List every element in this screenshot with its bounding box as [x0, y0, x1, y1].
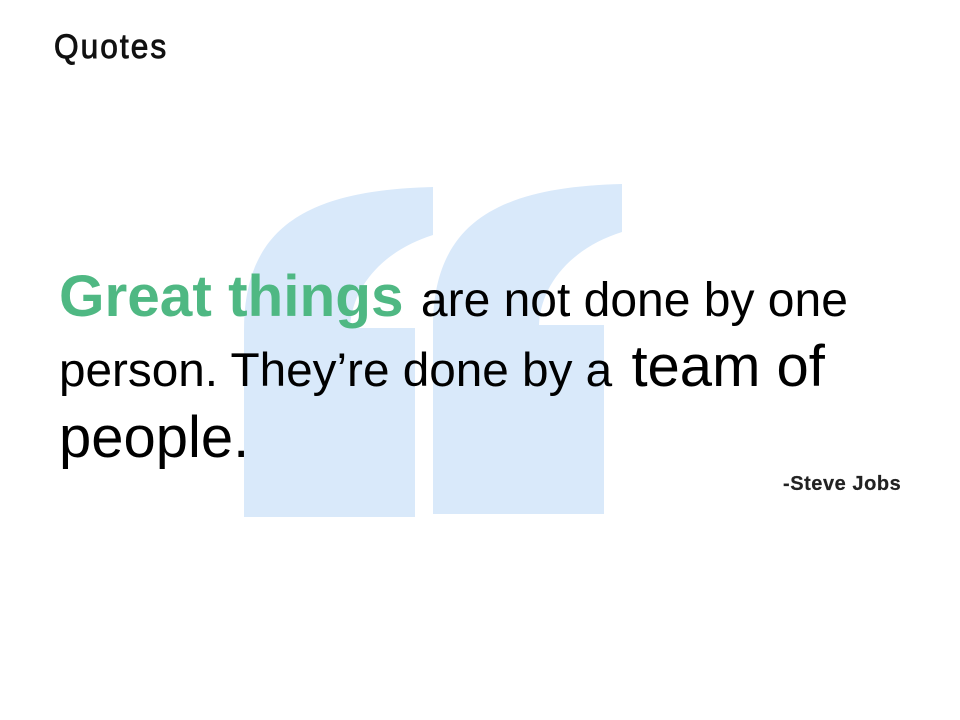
quote text: [59, 264, 848, 470]
quote text: Great things are not done by one: [59, 264, 848, 329]
quote text: people.: [59, 405, 249, 470]
quote text: person. They’re done by a team of: [59, 334, 825, 399]
attribution: -Steve Jobs: [783, 473, 901, 495]
title: Quotes: [54, 28, 168, 66]
